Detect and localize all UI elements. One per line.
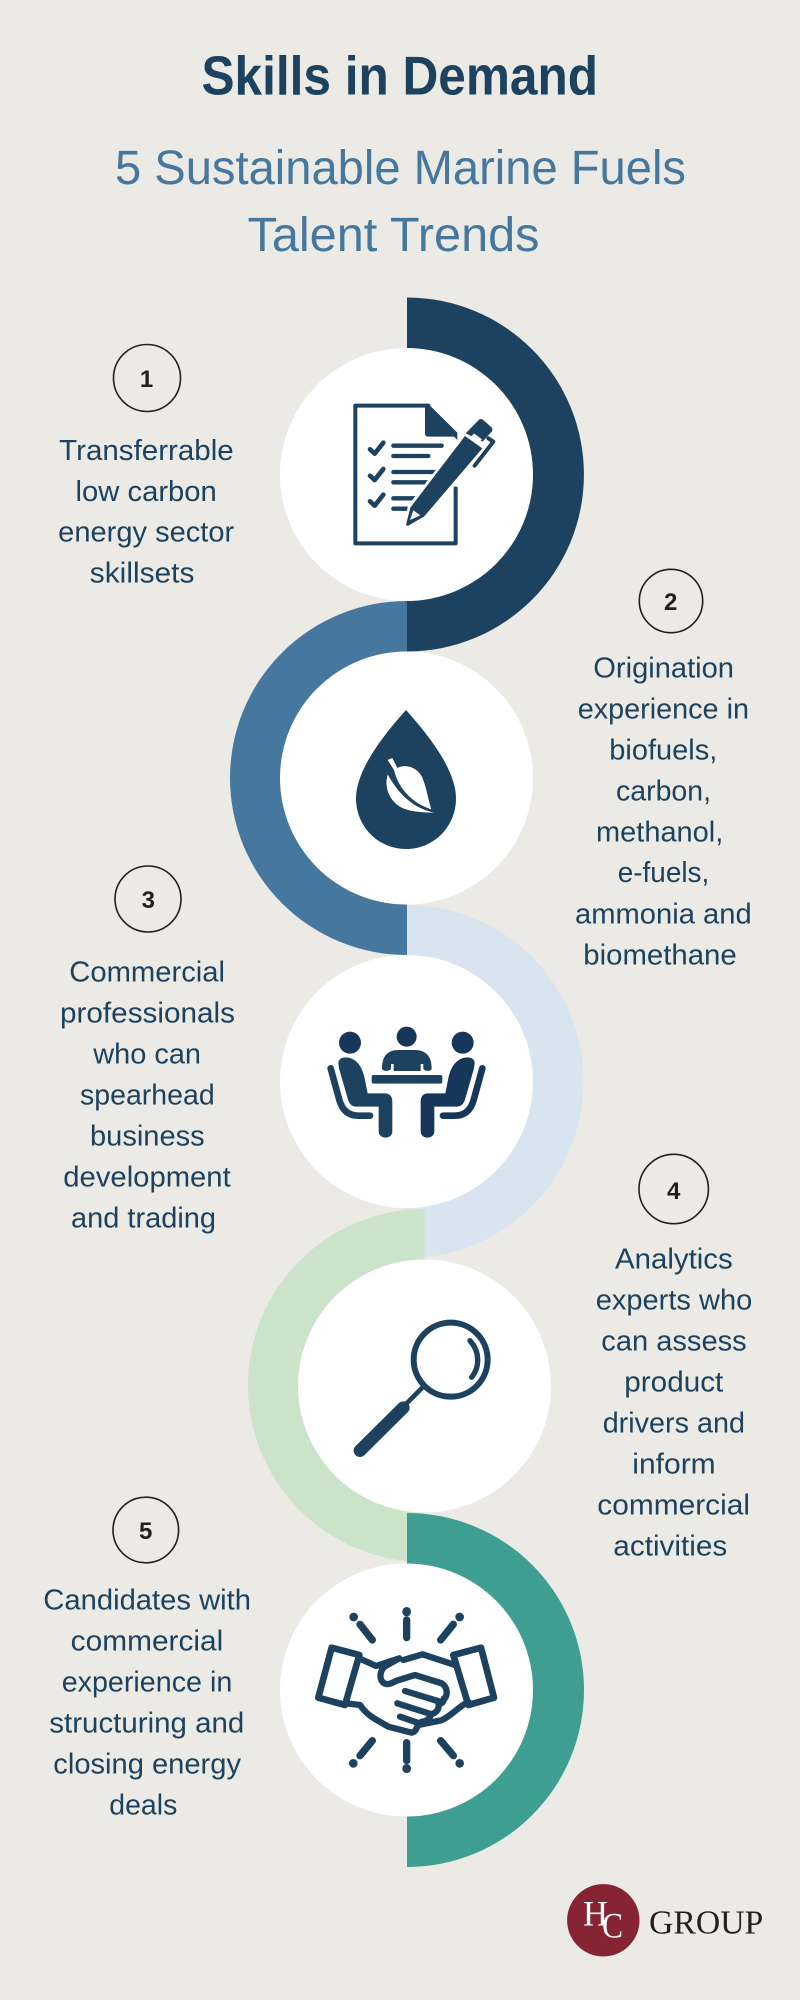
step 1 badge: 1 (140, 366, 153, 393)
step 4 text: commercial (597, 1489, 750, 1521)
step 1 badge (114, 344, 180, 412)
step 5 text: experience in (62, 1666, 232, 1698)
arc 2: steel blue (230, 601, 407, 955)
step 3 text: development (63, 1162, 231, 1194)
step 5 text: structuring and (49, 1707, 244, 1739)
step 5 text: closing energy (53, 1748, 242, 1780)
step 2 text (575, 652, 752, 971)
subtitle: Talent Trends (248, 208, 540, 262)
arc 3: pale blue (407, 905, 584, 1258)
circle 2 (280, 652, 533, 904)
subtitle: 5 Sustainable Marine Fuels (115, 141, 686, 195)
step 3 badge: 3 (142, 887, 155, 914)
step 4 text: Analytics (615, 1243, 733, 1275)
step 5 badge (113, 1497, 179, 1563)
step 1 text: skillsets (90, 558, 194, 590)
step 4 badge: 4 (667, 1178, 681, 1205)
arc 1: dark navy (407, 298, 584, 652)
step 2 text: ammonia and (575, 898, 752, 930)
step 4 text: product (624, 1366, 723, 1398)
icon: magnifying glass (360, 1323, 488, 1451)
step 2 text: methanol, (596, 817, 723, 849)
logo: HC Group: GROUP (649, 1904, 763, 1941)
step 2 text: biofuels, (609, 734, 717, 766)
step 3 text: business (90, 1120, 205, 1152)
step 3 text: and trading (71, 1202, 216, 1234)
step 4 text: drivers and (603, 1407, 745, 1439)
icon: meeting around table (331, 1027, 482, 1138)
step 3 text (60, 957, 235, 1234)
logo: HC Group (567, 1884, 763, 1957)
step 5 text: deals (109, 1789, 177, 1821)
step 5 text (43, 1584, 251, 1821)
circle 5 (280, 1564, 533, 1816)
step 4 text: can assess (601, 1325, 747, 1357)
logo: HC Group: C (602, 1906, 623, 1946)
arc 4: pale green (248, 1209, 424, 1562)
step 1 text (58, 435, 235, 590)
step 4 text: activities (613, 1530, 727, 1562)
step 1 text: energy sector (58, 516, 235, 548)
step 3 text: spearhead (80, 1079, 215, 1111)
icon: droplet with leaf (356, 710, 456, 849)
arc 5: teal (407, 1513, 584, 1867)
circle 1 (280, 348, 533, 601)
step 4 text: experts who (596, 1284, 752, 1316)
title: Skills in Demand (202, 44, 598, 106)
step 2 text: biomethane (583, 939, 737, 971)
circle 4 (298, 1260, 551, 1512)
step 1 text: Transferrable (59, 435, 234, 467)
step 2 text: Origination (593, 652, 734, 684)
step 5 text: commercial (71, 1625, 223, 1657)
subtitle (115, 141, 686, 262)
icon: checklist document with pen (355, 404, 493, 543)
step 3 text: who can (92, 1038, 201, 1070)
step 2 text: experience in (578, 693, 749, 725)
step 4 text (596, 1243, 752, 1562)
icon: handshake (318, 1611, 494, 1769)
step 2 badge: 2 (664, 589, 677, 616)
step 5 text: Candidates with (43, 1584, 251, 1616)
step 4 badge (639, 1154, 708, 1224)
logo: HC Group: H (583, 1894, 608, 1934)
step 4 text: inform (632, 1448, 716, 1480)
step 3 badge (115, 866, 181, 932)
step 2 text: e-fuels, (618, 857, 709, 889)
step 2 text: carbon, (616, 776, 711, 808)
step 5 badge: 5 (139, 1518, 152, 1545)
step 1 text: low carbon (76, 476, 217, 508)
circle 3 (280, 955, 533, 1208)
step 3 text: Commercial (69, 957, 225, 989)
step 3 text: professionals (60, 997, 235, 1029)
step 2 badge (639, 569, 703, 633)
